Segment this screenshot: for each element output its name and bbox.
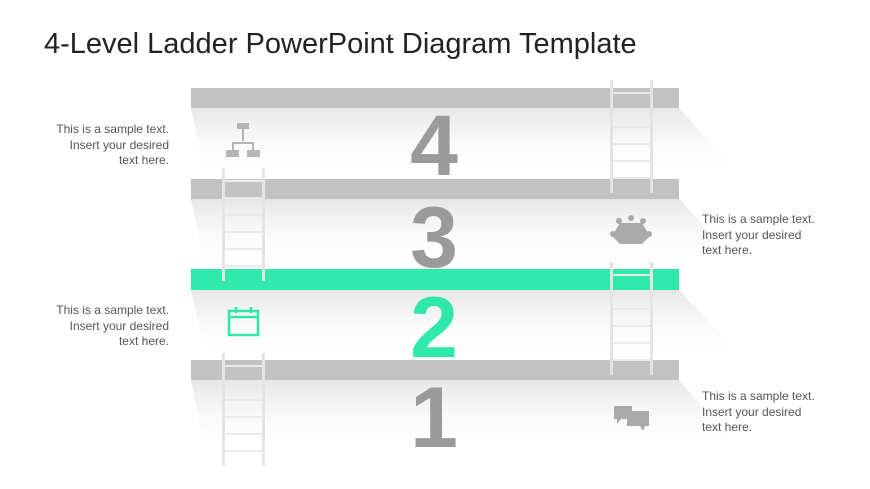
text right 2: text here.: [702, 420, 752, 434]
text left 1: This is a sample text.: [56, 122, 169, 136]
icon: chat: [614, 406, 649, 431]
text right 1: This is a sample text.: [702, 212, 815, 226]
text right 2: [702, 389, 815, 434]
text right 1: Insert your desired: [702, 228, 801, 242]
icon: meeting table: [610, 215, 652, 244]
icon: calendar: [229, 307, 258, 335]
numbers: 2: [410, 280, 458, 376]
text left 2: [56, 303, 169, 348]
bars: [191, 88, 679, 380]
ladders: [222, 80, 653, 466]
text right 2: This is a sample text.: [702, 389, 815, 403]
numbers: 1: [410, 370, 458, 466]
text left 1: [56, 122, 169, 167]
text left 2: text here.: [119, 334, 169, 348]
text left 1: text here.: [119, 153, 169, 167]
numbers: [410, 98, 458, 466]
text left 1: Insert your desired: [70, 138, 169, 152]
numbers: 3: [410, 190, 458, 286]
text right 2: Insert your desired: [702, 404, 801, 418]
text right 1: text here.: [702, 243, 752, 257]
icon: flowchart: [226, 123, 260, 157]
numbers: 4: [410, 98, 458, 194]
text right 1: [702, 212, 815, 257]
shadows: [191, 108, 740, 450]
title: 4-Level Ladder PowerPoint Diagram Template: [44, 28, 637, 60]
text left 2: This is a sample text.: [56, 303, 169, 317]
text left 2: Insert your desired: [70, 318, 169, 332]
